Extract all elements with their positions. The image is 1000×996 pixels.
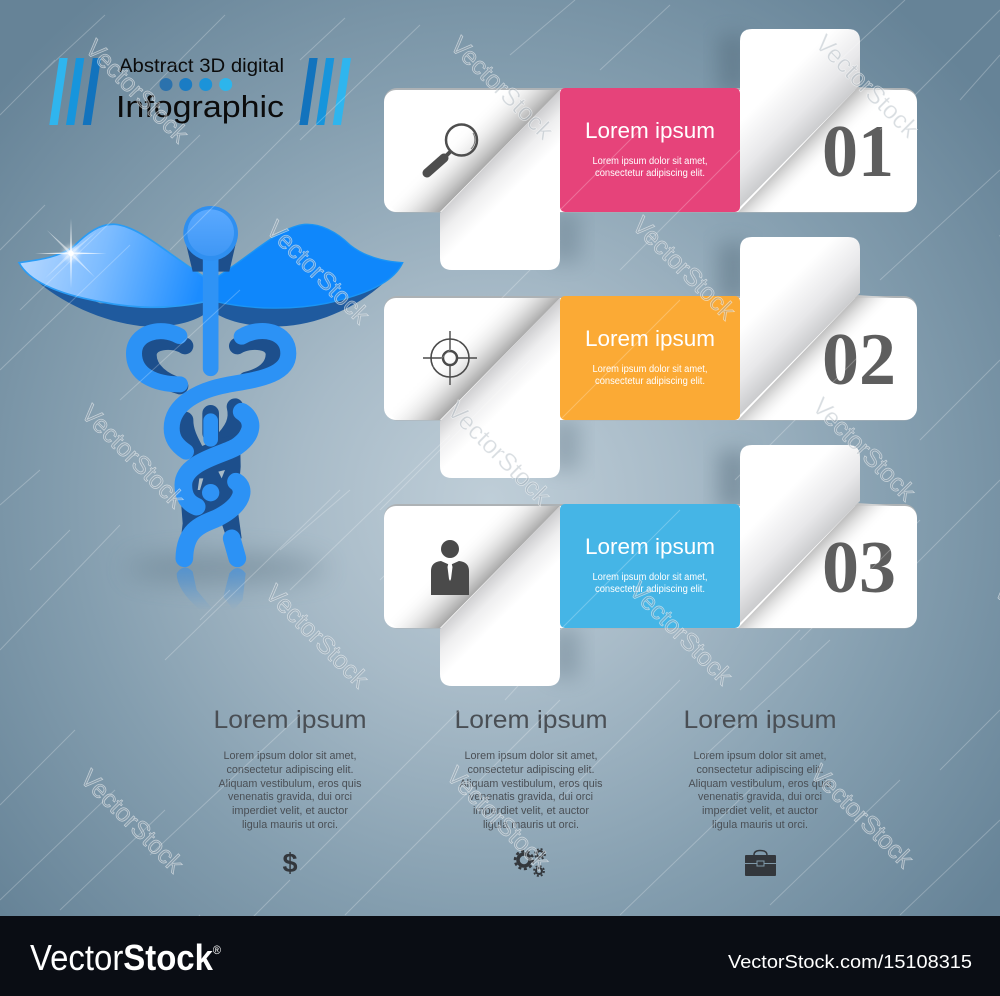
fold shadow left — [384, 90, 560, 212]
colour panel — [560, 504, 740, 628]
wing sparkle — [35, 218, 107, 288]
left flap shadow — [550, 420, 580, 470]
column 3 body — [688, 750, 832, 831]
column 2 body: venenatis gravida, dui orci — [469, 791, 593, 803]
column 2 body: Aliquam vestibulum, eros quis — [460, 778, 603, 790]
panel text: Lorem ipsum dolor sit amet, — [592, 364, 708, 375]
icon: briefcase — [745, 850, 776, 876]
panel heading: Lorem ipsum — [585, 534, 715, 559]
panel text — [592, 156, 708, 179]
watermarks: VectorStock — [805, 759, 919, 874]
right flap — [740, 237, 860, 415]
watermarks: VectorStock — [441, 761, 555, 876]
dark body — [178, 433, 242, 560]
staff lower ball — [202, 484, 219, 501]
column 1 body: ligula mauris ut orci. — [242, 819, 338, 831]
watermarks: VectorStock — [261, 215, 375, 330]
column 1 heading: Lorem ipsum — [214, 706, 366, 734]
panel text: Lorem ipsum dolor sit amet, — [592, 572, 708, 583]
card base — [384, 296, 917, 420]
column 3 body: ligula mauris ut orci. — [712, 819, 808, 831]
title logo — [49, 56, 351, 125]
column 1 body: Lorem ipsum dolor sit amet, — [224, 750, 356, 762]
row 3 — [384, 445, 917, 686]
number: 01 — [822, 111, 894, 193]
title line 2: Infographic — [116, 89, 284, 124]
column 1 body: imperdiet velit, et auctor — [232, 805, 348, 817]
column 3 body: venenatis gravida, dui orci — [698, 791, 822, 803]
watermarks: VectorStock — [627, 211, 741, 326]
left stripes — [49, 58, 101, 125]
icon: caduceus — [19, 206, 403, 610]
right wing — [217, 224, 403, 308]
number: 02 — [822, 319, 896, 401]
column 3 body: imperdiet velit, et auctor — [702, 805, 818, 817]
column 2 body: Lorem ipsum dolor sit amet, — [464, 750, 598, 762]
panel heading: Lorem ipsum — [585, 118, 715, 143]
watermarks: VectorStock — [807, 392, 921, 507]
footer logo: ® — [213, 943, 221, 957]
watermarks — [75, 29, 1000, 879]
watermarks: VectorStock — [624, 576, 738, 691]
fold shadow left — [384, 506, 560, 628]
icon: businessman — [431, 540, 469, 595]
title line 1: Abstract 3D digital — [119, 56, 284, 77]
panel heading: Lorem ipsum — [585, 326, 715, 351]
column 2 body: ligula mauris ut orci. — [483, 819, 579, 831]
panel text — [592, 364, 708, 387]
panel text: consectetur adipiscing elit. — [595, 584, 705, 595]
reflection — [177, 568, 246, 610]
column 3 body: Lorem ipsum dolor sit amet, — [694, 750, 826, 762]
column 2 body — [460, 750, 603, 831]
column 3 body: consectetur adipiscing elit. — [696, 764, 824, 776]
card base — [384, 504, 917, 628]
column 1 body: Aliquam vestibulum, eros quis — [218, 778, 362, 790]
column 3 body: Aliquam vestibulum, eros quis — [688, 778, 832, 790]
left wing — [19, 224, 205, 307]
right flap — [740, 29, 860, 207]
body gaps — [198, 470, 225, 490]
left flap shadow — [550, 212, 580, 262]
panel text: consectetur adipiscing elit. — [595, 376, 705, 387]
column 2 heading: Lorem ipsum — [454, 706, 608, 734]
panel text: consectetur adipiscing elit. — [595, 168, 705, 179]
panel text: Lorem ipsum dolor sit amet, — [592, 156, 708, 167]
watermarks: VectorStock — [445, 31, 559, 146]
row 1 — [384, 29, 917, 270]
footer bar — [0, 916, 1000, 996]
staff shadow — [184, 237, 237, 272]
column 1 body: venenatis gravida, dui orci — [228, 791, 352, 803]
watermarks: VectorStock — [810, 29, 924, 144]
footer url: VectorStock.com/15108315 — [728, 952, 972, 972]
right flap shadow — [718, 451, 748, 509]
title dots — [160, 78, 232, 91]
card base — [384, 88, 917, 212]
left flap — [440, 506, 560, 686]
column 3 heading: Lorem ipsum — [684, 706, 836, 734]
colour panel — [560, 88, 740, 212]
right stripes — [299, 58, 351, 125]
row 2 — [384, 237, 917, 478]
right flap shadow — [718, 35, 748, 93]
staff — [187, 258, 234, 368]
lower snakes — [183, 412, 251, 558]
left flap — [440, 298, 560, 478]
column 1 text — [214, 706, 366, 831]
snake shadows — [148, 342, 274, 453]
footer logo: VectorStock — [30, 937, 221, 978]
fold shadow right — [738, 87, 900, 212]
wing undersides — [23, 268, 203, 327]
column 3 text — [684, 706, 836, 831]
icon: target — [423, 331, 477, 385]
column 2 body: imperdiet velit, et auctor — [473, 805, 589, 817]
watermarks: VectorStock — [260, 579, 374, 694]
watermarks: VectorStock — [76, 399, 190, 514]
icon: gears — [515, 849, 545, 876]
colour panel — [560, 296, 740, 420]
column 2 text — [454, 706, 608, 831]
column 1 body — [218, 750, 362, 831]
watermarks: VectorStock — [80, 34, 194, 149]
panel text — [592, 572, 708, 595]
right flap — [740, 445, 860, 623]
staff top ball — [183, 206, 238, 261]
left flap shadow — [550, 628, 580, 678]
fold shadow right — [738, 295, 900, 420]
left flap — [440, 90, 560, 270]
right flap shadow — [718, 243, 748, 301]
icon: magnifier — [427, 124, 477, 173]
fold shadow left — [384, 298, 560, 420]
number: 03 — [822, 527, 896, 609]
snakes — [134, 331, 288, 452]
icon: dollar: $ — [282, 848, 298, 878]
watermarks: VectorStock — [75, 764, 189, 879]
ground shadow — [127, 555, 327, 582]
watermarks: VectorStock — [442, 396, 556, 511]
fold shadow right — [738, 503, 900, 628]
column 2 body: consectetur adipiscing elit. — [468, 764, 594, 776]
column 1 body: consectetur adipiscing elit. — [226, 764, 354, 776]
